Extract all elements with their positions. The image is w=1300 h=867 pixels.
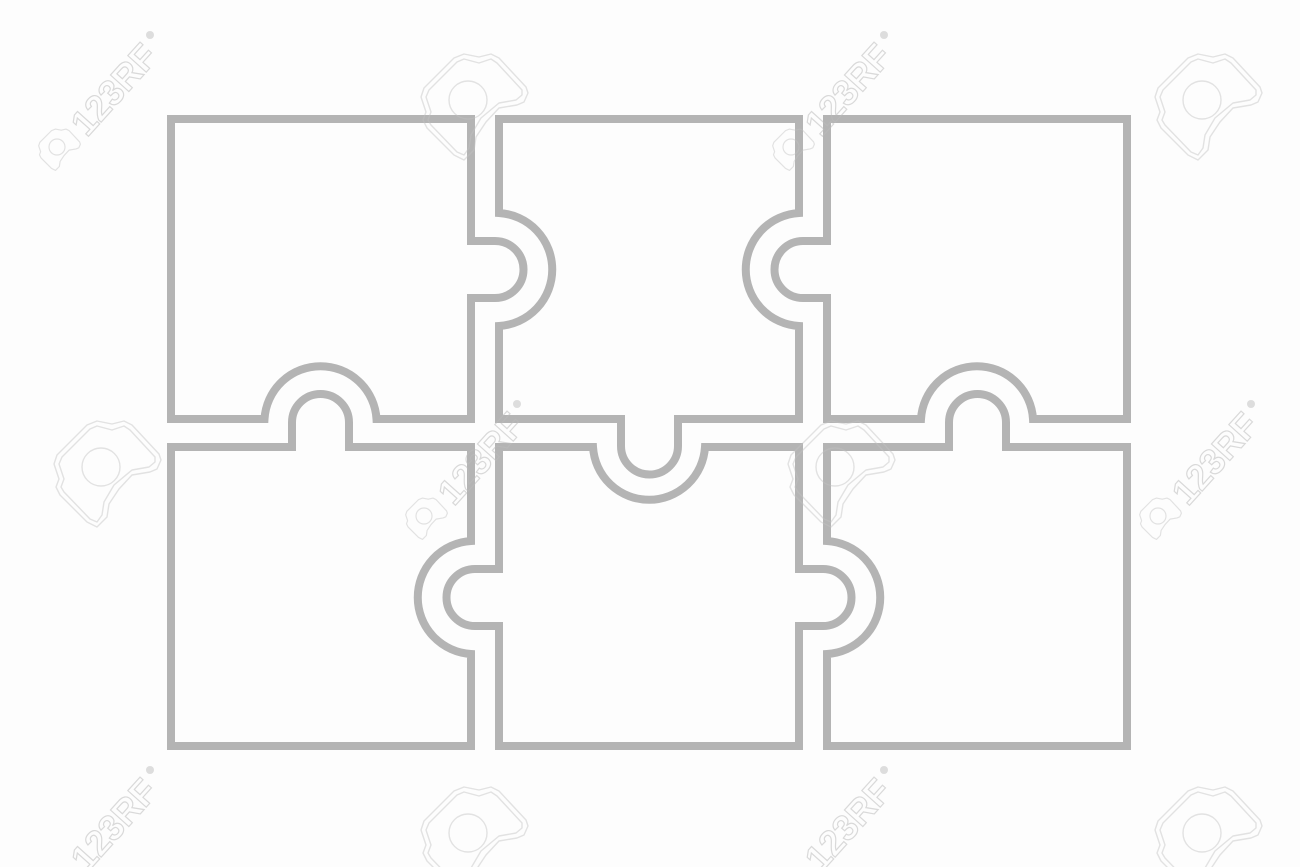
watermark: 123RF logo row 1 right: 123RF	[796, 36, 899, 143]
watermark: stamp icon row 1 centre	[421, 54, 528, 160]
puzzle piece: bottom right	[827, 394, 1127, 746]
watermark: 123RF logo row 2 right	[1140, 400, 1266, 539]
puzzle piece: top middle	[499, 119, 799, 475]
watermark: stamp icon row 2 left	[54, 421, 161, 527]
puzzle piece: top right	[774, 119, 1127, 419]
watermark: stamp icon row 1 right	[1155, 54, 1262, 160]
watermark: 123RF logo row 1 left	[39, 31, 165, 170]
puzzle piece: bottom middle	[446, 447, 852, 746]
watermark: 123RF logo row 2 centre: 123RF	[429, 405, 532, 512]
watermark: 123RF logo row 1 right	[773, 31, 899, 170]
puzzle piece: top left	[171, 119, 524, 419]
watermark: stamp icon row 3 centre	[421, 787, 528, 867]
watermark: stamp icon row 3 right	[1155, 787, 1262, 867]
puzzle piece: bottom left	[171, 394, 471, 746]
watermark: 123RF logo row 2 right: 123RF	[1163, 405, 1266, 512]
watermark: 123RF logo row 1 left: 123RF	[62, 36, 165, 143]
puzzle grid	[171, 119, 1127, 746]
watermark: 123RF logo row 2 centre	[406, 400, 532, 539]
watermark: stamp icon row 2 right	[788, 421, 895, 527]
